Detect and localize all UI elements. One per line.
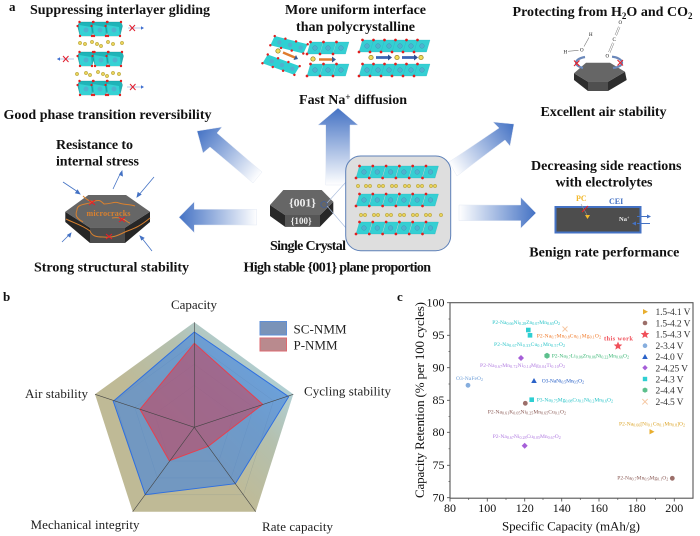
y tick labels <box>426 296 444 504</box>
x tick labels: 140 <box>553 501 571 515</box>
x tick labels: 100 <box>478 501 496 515</box>
y tick labels: 85 <box>432 393 444 407</box>
scatter chart <box>412 296 693 534</box>
y tick labels: 80 <box>432 425 444 439</box>
heading: fast Na+ diffusion: Fast Na+ diffusion <box>299 92 407 108</box>
x tick labels: 180 <box>628 501 646 515</box>
arrow: to air stability <box>449 122 514 176</box>
radar label: rate capacity: Rate capacity <box>262 519 334 534</box>
data labels: P2-Na0.67Ni0.33Cu0.1Mn0.57O2 <box>494 342 565 348</box>
radar background pentagon <box>95 322 293 512</box>
heading: good phase transition reversibility: Good phase transition reversibility <box>4 108 212 123</box>
heading: more uniform interface: More uniform interface <box>285 3 426 18</box>
y tick labels: 70 <box>432 490 444 504</box>
panel label b: b <box>3 289 10 304</box>
polycrystalline vs single crystal interface diagram <box>262 36 430 77</box>
y tick labels: 75 <box>432 458 444 472</box>
CEI protective layer diagram: CEI <box>609 197 623 206</box>
data labels: P2-Na0.66Ni0.28Zn0.07Mn0.65O2 <box>492 320 560 326</box>
icon: hexagon protected from H2O and CO2 <box>564 21 627 91</box>
voltage legend: 2-3.4 V <box>656 342 684 352</box>
layered single-crystal structure box <box>346 156 451 251</box>
single crystal hexagon with facets: {100} <box>291 216 312 226</box>
radar label: mechanical integrity: Mechanical integrity <box>30 517 140 532</box>
x tick labels <box>444 501 683 515</box>
heading: with electrolytes: with electrolytes <box>556 176 653 190</box>
radar grid <box>115 343 274 495</box>
voltage legend: 2-4.25 V <box>656 364 688 374</box>
y tick labels: 95 <box>432 328 444 342</box>
arrow: to good phase transition <box>197 127 262 183</box>
voltage legend: 2-4.4 V <box>656 387 684 397</box>
heading: protecting from H2O and CO2: Protecting from H2O and CO2 <box>512 5 693 20</box>
x tick labels: 200 <box>665 501 683 515</box>
data labels: P2-Na0.67Mn0.72Ni0.14Mg0.04Ti0.10O2 <box>480 363 565 369</box>
icon: hexagon protected from H2O and CO2: H <box>564 50 568 56</box>
arrow: to decreasing side reactions <box>459 197 536 228</box>
data labels: P2-Na0.67Ni0.28Cu0.05Mn0.67O2 <box>493 434 561 440</box>
panel label c: c <box>397 289 403 304</box>
label: high stable 001 plane proportion: High stable {001} plane proportion <box>244 260 431 276</box>
data labels: O3-NaNi0.5Mn0.5O2 <box>542 378 584 384</box>
y tick labels: 90 <box>432 360 444 374</box>
icon: hexagon protected from H2O and CO2: O <box>580 48 584 54</box>
voltage legend: 2-4.0 V <box>656 353 684 363</box>
heading: strong structural stability: Strong structural stability <box>34 260 189 276</box>
radar label: capacity: Capacity <box>171 297 218 312</box>
voltage legend <box>641 308 691 408</box>
heading: benign rate performance: Benign rate performance <box>529 246 679 260</box>
radar axes <box>95 322 293 512</box>
CEI protective layer diagram: PC <box>576 194 587 203</box>
data labels: P3-Na0.75Mg0.08Cu0.1Ni0.2Mn0.6O2 <box>537 398 613 404</box>
heading: excellent air stability: Excellent air stability <box>540 105 666 120</box>
y tick labels: 100 <box>426 296 444 310</box>
arrow: up to fast diffusion <box>318 108 358 185</box>
heading: suppressing interlayer gliding: Suppressing interlayer gliding <box>30 3 210 18</box>
plot frame and ticks <box>447 303 693 502</box>
crystal layers with blocked gliding <box>57 21 144 96</box>
series: SC-NMM <box>113 332 289 495</box>
microcracked hexagon with stress arrows <box>62 171 154 251</box>
data labels <box>456 320 685 482</box>
data labels: P2-Na0.7Li0.06Zn0.06Ni0.22Mn0.66O2 <box>552 354 629 360</box>
icon: hexagon protected from H2O and CO2: C <box>612 38 616 43</box>
heading: resistance to: Resistance to <box>56 138 133 153</box>
data labels: P2-Na0.66[Ni0.1Co0.1Mn0.8]O2 <box>619 422 685 428</box>
data labels: this work <box>604 336 633 342</box>
series: P-NMM <box>140 343 263 461</box>
radar label: air stability: Air stability <box>25 386 88 401</box>
heading: internal stress: internal stress <box>56 154 140 170</box>
data labels: P2-Na0.7Mn0.8Cu0.1Mg0.1O2 <box>537 334 601 340</box>
radar label: cycling stability: Cycling stability <box>304 384 392 398</box>
CEI protective layer diagram <box>556 194 651 232</box>
x axis title: Specific Capacity (mAh/g) <box>502 518 640 534</box>
icon: hexagon protected from H2O and CO2: O <box>618 21 622 26</box>
microcracked hexagon with stress arrows: microcracks <box>86 209 130 218</box>
data points <box>466 326 675 481</box>
voltage legend: 1.5-4.1 V <box>656 308 691 318</box>
radar chart <box>95 322 293 512</box>
y axis title: Capacity Retention (% per 100 cycles) <box>412 302 427 498</box>
radar legend <box>260 322 347 352</box>
CEI protective layer diagram: Na+ <box>619 215 630 223</box>
icon: hexagon protected from H2O and CO2: H <box>589 33 593 38</box>
voltage legend: 2-4.3 V <box>656 376 684 386</box>
data labels: O3-NaFeO2 <box>456 376 483 382</box>
label: single crystal: Single Crystal <box>270 239 346 254</box>
heading: decreasing side reactions: Decreasing side reactions <box>531 159 682 174</box>
x tick labels: 160 <box>590 501 608 515</box>
single crystal hexagon with facets <box>270 182 346 228</box>
voltage legend: 1.5-4.3 V <box>656 330 691 340</box>
arrow: to structural stability <box>179 202 257 233</box>
voltage legend: 1.5-4.2 V <box>656 319 691 329</box>
voltage legend: 2-4.5 V <box>656 398 684 408</box>
heading: than polycrystalline: than polycrystalline <box>296 20 415 35</box>
x tick labels: 120 <box>516 501 534 515</box>
radar legend: P-NMM <box>294 338 338 352</box>
single crystal hexagon with facets: {001} <box>289 196 316 210</box>
data labels: P2-Na0.7Mn0.9Mg0.1O2 <box>617 476 668 482</box>
radar legend: SC-NMM <box>294 322 347 336</box>
icon: hexagon protected from H2O and CO2: O <box>606 54 610 60</box>
data labels: P2-Na0.61K0.05Ni0.25Mn0.65Cu0.1O2 <box>488 410 566 416</box>
x tick labels: 80 <box>444 501 456 515</box>
